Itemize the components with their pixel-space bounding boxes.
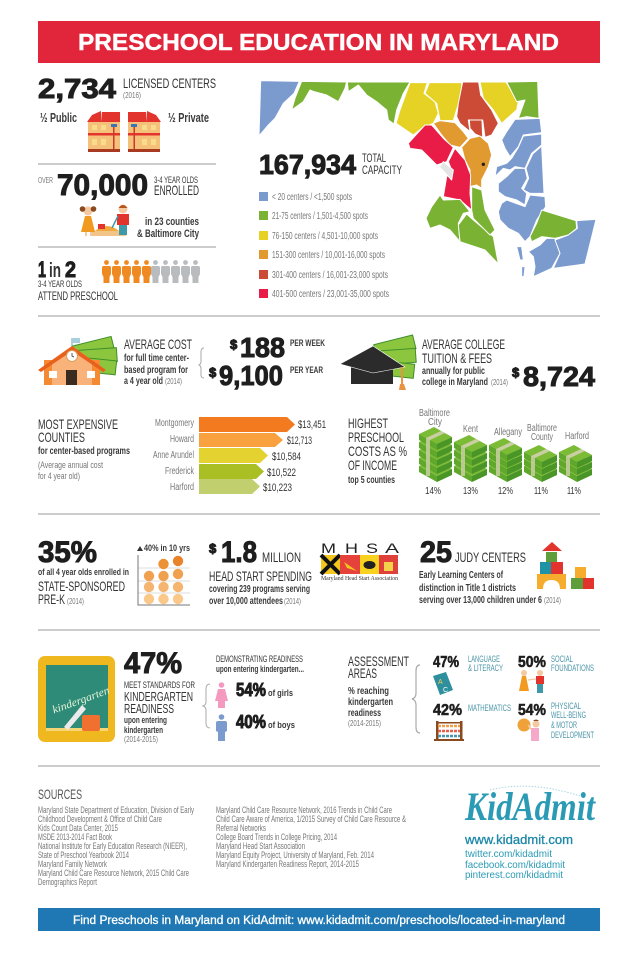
stat: girls and boys readiness: 40% [236, 712, 266, 732]
contact links: www.kidadmit.com [464, 833, 573, 847]
text: average cost: a 4 year old [124, 376, 163, 387]
title banner [38, 21, 600, 63]
stat: Judy Centers: (2014) [544, 596, 561, 605]
stat: head start spending: $ [209, 541, 217, 556]
sources list, left column: Maryland State Department of Education, Division of Early [38, 805, 194, 816]
chart: county cost arrow bars: $10,522 [267, 467, 296, 479]
map legend [259, 192, 389, 300]
text: most expensive counties [38, 416, 130, 482]
text: assessment areas: readiness [348, 708, 381, 719]
map of Maryland counties [259, 81, 596, 277]
chart: county cost arrow bars: $12,713 [287, 435, 312, 447]
assessment area: social foundations: SOCIAL [551, 654, 573, 665]
logo: Maryland Head Start Association: M [321, 540, 336, 556]
assessment area: social foundations: FOUNDATIONS [551, 663, 594, 674]
footer call-to-action banner [38, 908, 600, 931]
stat: weekly and yearly cost: PER YEAR [290, 365, 323, 376]
contact links: twitter.com/kidadmit [465, 848, 552, 860]
stat: girls and boys readiness: of girls [268, 688, 293, 699]
stat: Judy Centers: serving over 13,000 children under 6 [419, 595, 542, 606]
footer call-to-action banner: Find Preschools in Maryland on KidAdmit: www.kidadmit.com/preschools/located-in-maryland [73, 915, 565, 927]
text: highest preschool costs [348, 415, 407, 486]
text: college tuition: TUITION & FEES [422, 350, 492, 366]
assessment area: language and literacy: LANGUAGE [468, 654, 500, 665]
text: college tuition: college in Maryland [422, 377, 488, 388]
assessment area: language and literacy: C [443, 687, 448, 694]
stat: head start spending: 1.8 [221, 536, 257, 569]
chart: county cost arrow bars: $10,223 [263, 482, 292, 494]
stat: state-sponsored pre-K: STATE-SPONSORED [38, 578, 125, 594]
stat: 1 in 2 attend preschool: ATTEND PRESCHOOL [38, 289, 118, 303]
stat: licensed centers: ½ Private [168, 110, 209, 125]
sources list, left column: Childhood Development & Office of Child Care [38, 814, 162, 825]
stat: kindergarten readiness: KINDERGARTEN [124, 689, 193, 704]
stat: kindergarten readiness [124, 647, 195, 744]
text: average cost [124, 336, 192, 387]
stat: licensed centers: ½ Public [40, 110, 77, 125]
sources list, right column: Maryland Child Care Resource Network, 2016 Trends in Child Care [216, 805, 392, 816]
assessment area: physical well-being and motor development: PHYSICAL [551, 701, 581, 712]
stat: children enrolled: & Baltimore City [137, 228, 200, 240]
sources list, left column: Maryland Child Care Resource Network, 2015 Child Care [38, 868, 189, 879]
assessment area: social foundations [518, 654, 594, 693]
map legend: 151-300 centers / 10,001-16,000 spots [272, 250, 385, 261]
sources list, left column: National Institute for Early Education Research (NIEER), [38, 841, 187, 852]
stat: 1 in 2 attend preschool [38, 247, 216, 303]
text: most expensive counties: MOST EXPENSIVE [38, 416, 118, 432]
chart: dot growth chart [137, 543, 190, 605]
assessment area: language and literacy: & LITERACY [468, 663, 503, 674]
stat: children enrolled: ENROLLED [154, 182, 199, 198]
stat: kindergarten readiness: READINESS [124, 701, 174, 716]
text: average cost: AVERAGE COST [124, 336, 192, 352]
stat: kindergarten readiness: upon entering [124, 715, 167, 726]
stat: weekly and yearly cost: $ [230, 337, 238, 352]
stat: state-sponsored pre-K: PRE-K [38, 591, 65, 607]
map legend: 21-75 centers / 1,501-4,500 spots [272, 211, 368, 222]
title banner: PRESCHOOL EDUCATION IN MARYLAND [78, 29, 559, 55]
stat: head start spending: covering 239 programs serving [209, 584, 310, 595]
chart: money stacks by county: Allegany [494, 427, 522, 438]
text: college tuition [422, 336, 508, 388]
chart: money stacks by county: City [428, 417, 442, 428]
stat: kindergarten readiness: (2014-2015) [124, 734, 158, 744]
stat: girls and boys readiness: 54% [236, 680, 266, 700]
assessment area: physical well-being and motor development: WELL-BEING [551, 710, 586, 721]
chart: money stacks by county: 11% [534, 486, 548, 497]
stat: state-sponsored pre-K: of all 4 year olds enrolled in [38, 567, 129, 578]
stat: kindergarten readiness: 47% [124, 647, 182, 680]
logo: Maryland Head Start Association: A [385, 540, 400, 556]
stat: Judy Centers: 25 [420, 536, 452, 569]
stat: total capacity: TOTAL [362, 151, 386, 165]
stat: 1 in 2 attend preschool: 3-4 YEAR OLDS [38, 279, 82, 289]
sources list, left column: MSDE 2013-2014 Fact Book [38, 832, 112, 843]
contact links: facebook.com/kidadmit [465, 859, 565, 871]
stat: children enrolled: 70,000 [57, 169, 148, 202]
text: demonstrating readiness: upon entering kindergarten... [216, 664, 304, 675]
stat: Judy Centers: Early Learning Centers of [419, 570, 503, 581]
text: assessment areas: (2014-2015) [348, 718, 381, 728]
sources list, left column: Demographics Report [38, 877, 97, 888]
logo: Maryland Head Start Association [321, 540, 400, 582]
stat: children enrolled: in 23 counties [145, 216, 199, 228]
assessment area: mathematics: 42% [433, 702, 462, 719]
text: highest preschool costs: PRESCHOOL [348, 429, 404, 445]
stat: 1 in 2 attend preschool: 1 [38, 257, 46, 282]
assessment area: language and literacy [433, 654, 503, 695]
icon: schoolhouse with money [38, 336, 117, 385]
sources list, right column: Maryland Head Start Association [216, 841, 305, 852]
stat: licensed centers [38, 73, 216, 125]
stat: licensed centers: (2016) [123, 91, 141, 100]
logo: Maryland Head Start Association: S [366, 540, 378, 556]
stat: head start spending: (2014) [284, 597, 301, 606]
icon: private school building [128, 111, 161, 152]
stat: 1 in 2 attend preschool: in [49, 260, 61, 282]
chart: county cost arrow bars: $10,584 [272, 451, 301, 463]
icon: kindergarten chalkboard [38, 656, 115, 742]
stat: total capacity: 167,934 [259, 149, 356, 180]
chart: money stacks by county: Baltimore [527, 423, 557, 434]
chart: money stacks by county: 11% [567, 486, 581, 497]
KidAdmit logo: KidAdmit [464, 784, 597, 829]
assessment area: social foundations: 50% [518, 654, 546, 671]
assessment area: mathematics: MATHEMATICS [468, 703, 511, 714]
chart: money stacks by county: 14% [425, 486, 441, 497]
stat: total capacity: CAPACITY [362, 163, 402, 177]
stat: weekly and yearly cost: 188 [240, 332, 285, 363]
stat: state-sponsored pre-K [38, 536, 129, 607]
text: average cost: (2014) [165, 377, 182, 386]
text: most expensive counties: COUNTIES [38, 429, 85, 445]
chart: money stacks by county: County [531, 432, 553, 443]
stat: children enrolled: 3-4 YEAR OLDS [154, 175, 198, 185]
chart: money stacks by county: Baltimore [419, 408, 450, 419]
text: assessment areas: ASSESSMENT [348, 653, 409, 669]
stat: kindergarten readiness: kindergarten [124, 725, 163, 736]
sources list, right column: Maryland Kindergarten Readiness Report, 2014-2015 [216, 859, 359, 870]
stat: head start spending: MILLION [262, 549, 301, 565]
stat: weekly and yearly cost: 9,100 [219, 360, 283, 391]
sources list, left column: State of Preschool Yearbook 2014 [38, 850, 129, 861]
icon: public school building [87, 111, 120, 152]
sources list, left column [38, 805, 194, 888]
chart: county cost arrow bars: Harford [170, 482, 194, 493]
sources list, right column: College Board Trends in College Pricing, 2014 [216, 832, 337, 843]
map legend: < 20 centers / <1,500 spots [272, 192, 352, 203]
stat: Judy Centers: JUDY CENTERS [455, 549, 526, 565]
icon: boy figure [216, 714, 227, 741]
stat: kindergarten readiness: MEET STANDARDS FOR [124, 680, 195, 690]
sources list, right column: Referral Networks [216, 823, 266, 834]
stat: weekly and yearly cost: PER WEEK [290, 338, 325, 349]
contact links [464, 833, 573, 881]
text: most expensive counties: (Average annual cost [38, 460, 103, 471]
stat: weekly and yearly cost: $ [209, 365, 217, 380]
chart: county cost arrow bars: Howard [170, 434, 194, 445]
icon: graduation cap with money [340, 335, 416, 390]
chart: money stacks by county: Kent [463, 424, 478, 435]
stat: 1 in 2 attend preschool: 2 [65, 257, 76, 282]
text: average cost: for full time center- [124, 353, 189, 364]
stat: children enrolled [38, 164, 216, 240]
stat: weekly and yearly cost [209, 332, 325, 391]
stat: licensed centers: LICENSED CENTERS [123, 75, 216, 91]
stat: state-sponsored pre-K: (2014) [67, 597, 84, 606]
text: most expensive counties: for center-based programs [38, 446, 130, 457]
brace [412, 665, 420, 733]
map legend: 301-400 centers / 16,001-23,000 spots [272, 270, 388, 281]
chart: money stacks by county: 13% [463, 486, 478, 497]
sources heading: SOURCES [38, 786, 82, 802]
chart: county cost arrow bars: Frederick [165, 466, 195, 477]
text: demonstrating readiness [216, 654, 304, 675]
text: most expensive counties: for 4 year old) [38, 471, 80, 482]
text: average cost: based program for [124, 365, 188, 376]
stat: state-sponsored pre-K: 35% [38, 536, 97, 569]
sources list, left column: Kids Count Data Center, 2015 [38, 823, 118, 834]
chart: county cost arrow bars: Montgomery [155, 418, 194, 429]
stat: tuition amount: 8,724 [523, 361, 595, 392]
stat: licensed centers: 2,734 [38, 73, 116, 104]
brace [203, 684, 210, 728]
brace [199, 348, 204, 378]
text: assessment areas: kindergarten [348, 697, 393, 708]
sources list, right column: Child Care Aware of America, 1/2015 Survey of Child Care Resource & [216, 814, 406, 825]
assessment area: physical well-being and motor development: DEVELOPMENT [551, 730, 594, 741]
stat: Judy Centers: distinction in Title 1 districts [419, 583, 516, 594]
assessment area: physical well-being and motor development [518, 701, 594, 741]
chart: money stacks by county: Harford [565, 431, 589, 442]
icon: kindergarten chalkboard: kindergarten [51, 684, 112, 716]
contact links: pinterest.com/kidadmit [465, 869, 563, 881]
map legend: 401-500 centers / 23,001-35,000 spots [272, 289, 389, 300]
stat: head start spending: over 10,000 attendees [209, 596, 283, 607]
assessment area: physical well-being and motor development: 54% [518, 702, 546, 719]
stat: girls and boys readiness [236, 680, 295, 732]
text: assessment areas: % reaching [348, 686, 389, 697]
stat: Judy Centers [419, 536, 561, 606]
assessment area: language and literacy: A [438, 679, 443, 686]
icon: toy blocks [537, 542, 594, 589]
logo: Maryland Head Start Association: Maryland Head Start Association [321, 576, 398, 582]
assessment area: physical well-being and motor development: & MOTOR [551, 720, 577, 731]
assessment area: language and literacy: 47% [433, 654, 459, 671]
text: highest preschool costs: HIGHEST [348, 415, 388, 431]
chart: county cost arrow bars: $13,451 [298, 419, 326, 431]
chart: county cost arrow bars: Anne Arundel [153, 450, 194, 461]
text: college tuition: (2014) [491, 378, 508, 387]
chart: county cost arrow bars [153, 417, 326, 494]
text: college tuition: annually for public [422, 366, 485, 377]
logo: Maryland Head Start Association: H [345, 540, 358, 556]
text: college tuition: AVERAGE COLLEGE [422, 336, 505, 352]
stat: girls and boys readiness: of boys [268, 720, 295, 731]
sources list, right column [216, 805, 406, 870]
map legend: 76-150 centers / 4,501-10,000 spots [272, 231, 378, 242]
stat: head start spending: HEAD START SPENDING [209, 568, 312, 584]
icon: girl figure [215, 682, 228, 708]
sources list, left column: Maryland Family Network [38, 859, 107, 870]
chart: money stacks by county: 12% [498, 486, 513, 497]
chart: money stacks by county [419, 408, 592, 497]
text: highest preschool costs: OF INCOME [348, 457, 397, 473]
text: assessment areas [348, 653, 409, 728]
text: highest preschool costs: top 5 counties [348, 475, 395, 486]
stat: tuition amount: $ [512, 365, 520, 380]
icon: row of ten people, five highlighted [102, 260, 200, 283]
stat: head start spending [209, 536, 312, 607]
stat: children enrolled: OVER [38, 176, 53, 185]
text: demonstrating readiness: DEMONSTRATING READINESS [216, 654, 303, 664]
sources list, right column: Maryland Equity Project, University of Maryland, Feb. 2014 [216, 850, 374, 861]
text: highest preschool costs: COSTS AS % [348, 443, 407, 459]
chart: dot growth chart: 40% in 10 yrs [144, 543, 190, 554]
icon: kids at sandbox [80, 204, 129, 236]
assessment area: mathematics [433, 702, 511, 741]
text: assessment areas: AREAS [348, 665, 377, 681]
